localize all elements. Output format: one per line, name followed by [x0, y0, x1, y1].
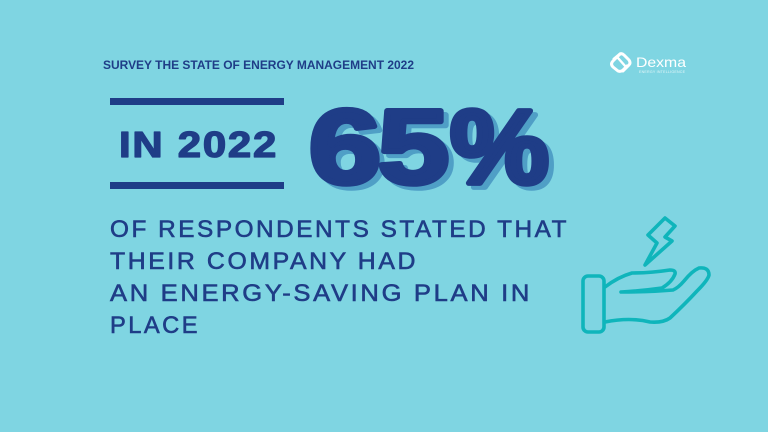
- statement text: AN ENERGY-SAVING PLAN IN: [110, 280, 532, 307]
- percentage shadow: 5: [383, 93, 454, 210]
- icon: hand holding energy bolt: [583, 218, 709, 332]
- statement text: OF RESPONDENTS STATED THAT: [110, 216, 569, 243]
- percentage value: 6: [309, 89, 381, 206]
- percentage shadow: 6: [314, 93, 386, 210]
- lightning bolt: [645, 218, 675, 265]
- statement text: [110, 216, 569, 339]
- survey heading: SURVEY THE STATE OF ENERGY MANAGEMENT 2022: [103, 60, 414, 72]
- big percentage: [309, 89, 554, 210]
- hand: [605, 268, 709, 322]
- logo tagline: ENERGY INTELLIGENCE: [639, 70, 686, 74]
- logo: Dexma: [612, 54, 686, 74]
- percentage value: [309, 89, 549, 206]
- cuff: [583, 276, 604, 332]
- top rule: [110, 98, 284, 105]
- percentage shadow: [314, 93, 554, 210]
- bottom rule: [110, 182, 284, 189]
- percentage value: %: [450, 89, 549, 206]
- year label block: [110, 98, 284, 189]
- logo wordmark: Dexma: [636, 54, 686, 70]
- percentage value: 5: [378, 89, 449, 206]
- statement text: PLACE: [110, 312, 200, 339]
- statement text: THEIR COMPANY HAD: [110, 248, 418, 275]
- percentage shadow: %: [455, 93, 554, 210]
- logo mark: [612, 54, 630, 71]
- year label: IN 2022: [119, 124, 278, 165]
